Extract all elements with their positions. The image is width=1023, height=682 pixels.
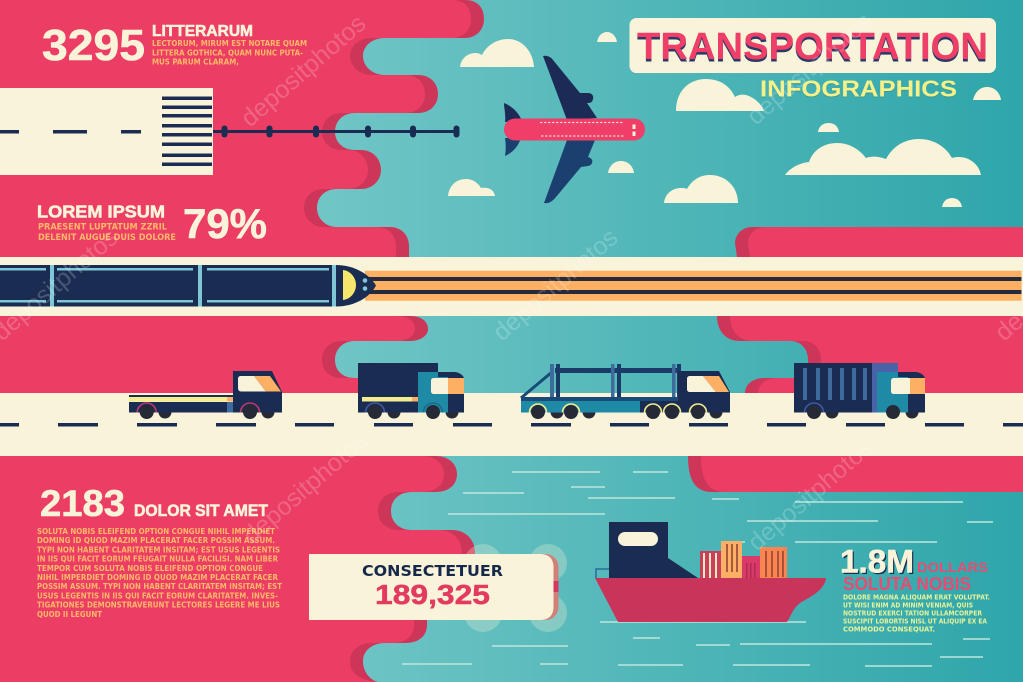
- icon: box truck: [358, 363, 464, 419]
- stat: 2183 dolor sit amet: TYPI NON HABENT CLARITATEM INSITAM; EST USUS LEGENTIS: [37, 545, 280, 554]
- icon: high speed train: [0, 265, 376, 306]
- stat: 3295 litterarum: LECTORUM, MIRUM EST NOTARE QUAM: [152, 39, 307, 48]
- callout: consectetuer 189,325: [309, 544, 567, 632]
- stat: 1.8M dollars soluta nobis: SUSCIPIT LOBORTIS NISL UT ALIQUIP EX EA: [843, 618, 987, 626]
- title plate: [630, 18, 996, 73]
- stat: lorem ipsum 79%: PRAESENT LUPTATUM ZZRIL: [38, 222, 167, 232]
- panel: bottom right pink wave: [688, 456, 1023, 492]
- stat: 2183 dolor sit amet: NIHIL IMPERDIET DOMING ID QUOD MAZIM PLACERAT FACER: [37, 573, 278, 582]
- road: [0, 393, 1023, 456]
- panel: middle right pink wave: [717, 316, 1023, 393]
- title: transportation: TRANSPORTATION: [637, 28, 988, 70]
- runway approach lights: [213, 126, 460, 138]
- stat: 2183 dolor sit amet: POSSIM ASSUM. TYPI NON HABENT CLARITATEM INSITAM; EST: [37, 582, 282, 591]
- watermarks: depositphotos: [238, 426, 373, 550]
- stat: lorem ipsum 79%: LOREM IPSUM: [37, 202, 165, 222]
- stat: 1.8M dollars soluta nobis: 1.8M: [840, 544, 914, 580]
- stat: 1.8M dollars soluta nobis: 1.8M: [842, 545, 916, 581]
- watermarks: depositphotos: [236, 9, 371, 133]
- stat: 3295 litterarum: MUS PARUM CLARAM,: [152, 58, 239, 66]
- stat: 1.8M dollars soluta nobis: NOSTRUD EXERCI TATION ULLAMCORPER: [843, 610, 983, 618]
- icon: airplane: [504, 56, 645, 203]
- stat: 2183 dolor sit amet: QUOD II LEGUNT: [37, 610, 102, 619]
- icon: car carrier truck: [521, 364, 730, 419]
- stat: 1.8M dollars soluta nobis: DOLORE MAGNA ALIQUAM ERAT VOLUTPAT.: [843, 594, 990, 602]
- stat: 3295 litterarum: 3295: [42, 21, 145, 70]
- stat: 2183 dolor sit amet: TIGATIONES DEMONSTRAVERUNT LECTORES LEGERE ME LIUS: [37, 601, 280, 610]
- stat: 1.8M dollars soluta nobis: [840, 544, 990, 634]
- sea wave lines: [402, 472, 993, 666]
- clouds: [448, 32, 1001, 207]
- stat: 2183 dolor sit amet: DOLOR SIT AMET: [134, 502, 268, 520]
- subtitle: infographics: INFOGRAPHICS: [760, 76, 957, 102]
- subtitle: infographics: INFOGRAPHICS: [760, 76, 957, 102]
- icon: cargo ship: [595, 522, 826, 622]
- callout: consectetuer 189,325: CONSECTETUER: [362, 562, 503, 580]
- stat: lorem ipsum 79%: [37, 200, 267, 247]
- stat: 1.8M dollars soluta nobis: COMMODO CONSEQUAT.: [843, 626, 935, 634]
- stat: 2183 dolor sit amet: IN IIS QUI FACIT EORUM FEUGAIT NULLA FACILISI. NAM LIBER: [37, 555, 278, 564]
- train speed trail: [365, 271, 1022, 301]
- stat: 1.8M dollars soluta nobis: SOLUTA NOBIS: [843, 574, 971, 594]
- title: transportation: TRANSPORTATION: [637, 26, 988, 68]
- stat: 1.8M dollars soluta nobis: UT WISI ENIM AD MINIM VENIAM, QUIS: [843, 602, 973, 610]
- panel: upper right pink wave: [735, 227, 1023, 257]
- panel: middle left pink wave: [0, 316, 428, 393]
- stat: 2183 dolor sit amet: [37, 483, 282, 619]
- stat: 3295 litterarum: LITTERARUM: [152, 23, 253, 40]
- icon: flatbed truck: [129, 371, 282, 419]
- stat: 2183 dolor sit amet: DOMING ID QUOD MAZIM PLACERAT FACER POSSIM ASSUM.: [37, 536, 275, 545]
- stat: 2183 dolor sit amet: SOLUTA NOBIS ELEIFEND OPTION CONGUE NIHIL IMPERDIET: [37, 527, 275, 536]
- train track band: [0, 257, 1023, 316]
- panel: top left pink wave: [0, 0, 484, 257]
- stat: 2183 dolor sit amet: TEMPOR CUM SOLUTA NOBIS ELEIFEND OPTION CONGUE: [37, 564, 263, 573]
- watermarks: depositphotos: [743, 433, 878, 557]
- stat: lorem ipsum 79%: 79%: [183, 200, 267, 247]
- stat: 1.8M dollars soluta nobis: DOLLARS: [917, 559, 988, 575]
- icon: container truck: [794, 363, 925, 419]
- panel: bottom left pink wave: [0, 456, 475, 682]
- watermarks: depositphotos: [488, 223, 623, 347]
- callout: consectetuer 189,325: 189,325: [375, 579, 490, 610]
- watermarks: depositphotos: [742, 7, 877, 131]
- runway: [0, 88, 213, 175]
- stat: 3295 litterarum: [42, 21, 307, 70]
- stat: 2183 dolor sit amet: USUS LEGENTIS IN IIS QUI FACIT EORUM CLARITATEM. INVES-: [37, 591, 278, 600]
- stat: 3295 litterarum: LITTERA GOTHICA, QUAM NUNC PUTA-: [152, 48, 303, 58]
- stat: lorem ipsum 79%: DELENIT AUGUE DUIS DOLORE: [38, 233, 176, 243]
- stat: 2183 dolor sit amet: 2183: [40, 483, 125, 524]
